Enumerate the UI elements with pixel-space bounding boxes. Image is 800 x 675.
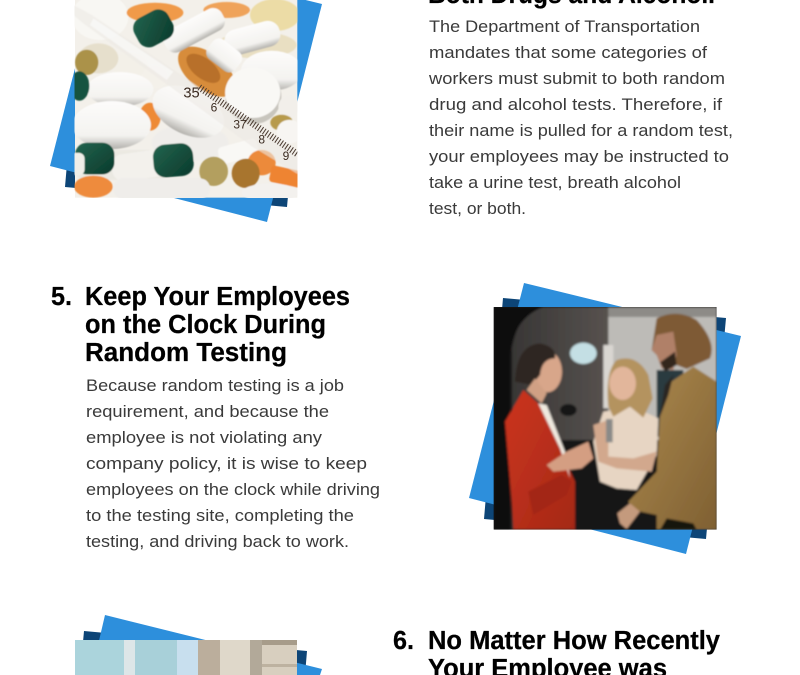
thermometer scale numbers: 9 [283, 149, 290, 163]
text block: section 4 body: workers must submit to both random [428, 69, 725, 88]
navy rotated square behind pills photo [65, 0, 307, 207]
blue rotated square behind office photo [91, 615, 322, 675]
text block: section 5 body: testing, and driving back to work. [86, 532, 349, 551]
navy rotated square behind colleagues photo [484, 298, 726, 539]
blue rotated square behind pills photo [50, 0, 322, 222]
heading: section 5: 5. [51, 283, 72, 311]
heading: section 6 (cut off) [393, 627, 721, 675]
text block: section 5 body: employees on the clock while driving [86, 480, 380, 499]
text block: section 5 body: company policy, it is wise to keep [86, 454, 367, 473]
text block: section 5 body: employee is not violating any [86, 428, 323, 447]
image frame: office with windows (cut off) [75, 615, 322, 675]
heading: section 5: Random Testing [85, 339, 287, 367]
text block: section 5 body [86, 376, 380, 551]
text block: section 5 body: to the testing site, completing the [86, 506, 354, 525]
text block: section 4 body: test, or both. [429, 199, 526, 218]
thermometer scale numbers: 6 [211, 101, 218, 115]
woman left [505, 390, 575, 530]
thermometer scale numbers: 37 [233, 117, 247, 131]
photo: colleagues [494, 307, 717, 530]
heading: section 6 (cut off): 6. [393, 627, 414, 655]
photo: office window [75, 640, 297, 675]
text block: section 5 body: requirement, and because the [86, 402, 329, 421]
navy rotated square behind office photo [80, 631, 307, 675]
woman centre [593, 407, 658, 490]
text block: section 4 body: drug and alcohol tests. Therefore, if [429, 95, 722, 114]
text block: section 4 body: mandates that some categories of [429, 43, 707, 62]
text block: section 4 body [428, 17, 733, 218]
text block: section 4 body: your employees may be instructed to [429, 147, 729, 166]
text block: section 4 body: their name is pulled for a random test, [429, 121, 733, 140]
blue rotated square behind colleagues photo [469, 283, 741, 554]
thermometer scale numbers: 35 [183, 85, 200, 101]
heading: section 5 [51, 283, 350, 367]
text block: section 4 body: The Department of Transportation [429, 17, 700, 36]
heading: section 5: Keep Your Employees [85, 283, 350, 311]
photo: pills [69, 0, 305, 202]
text block: section 4 body: take a urine test, breath alcohol [429, 173, 681, 192]
heading: section 5: on the Clock During [85, 311, 326, 339]
text block: section 5 body: Because random testing is a job [86, 376, 344, 395]
thermometer scale numbers [183, 85, 290, 163]
heading: section 6 (cut off): No Matter How Recently [428, 627, 721, 655]
man [628, 367, 717, 530]
thermometer scale numbers: 8 [258, 132, 265, 146]
image frame: three colleagues talking [469, 283, 741, 554]
image frame: pills and thermometer [50, 0, 322, 222]
